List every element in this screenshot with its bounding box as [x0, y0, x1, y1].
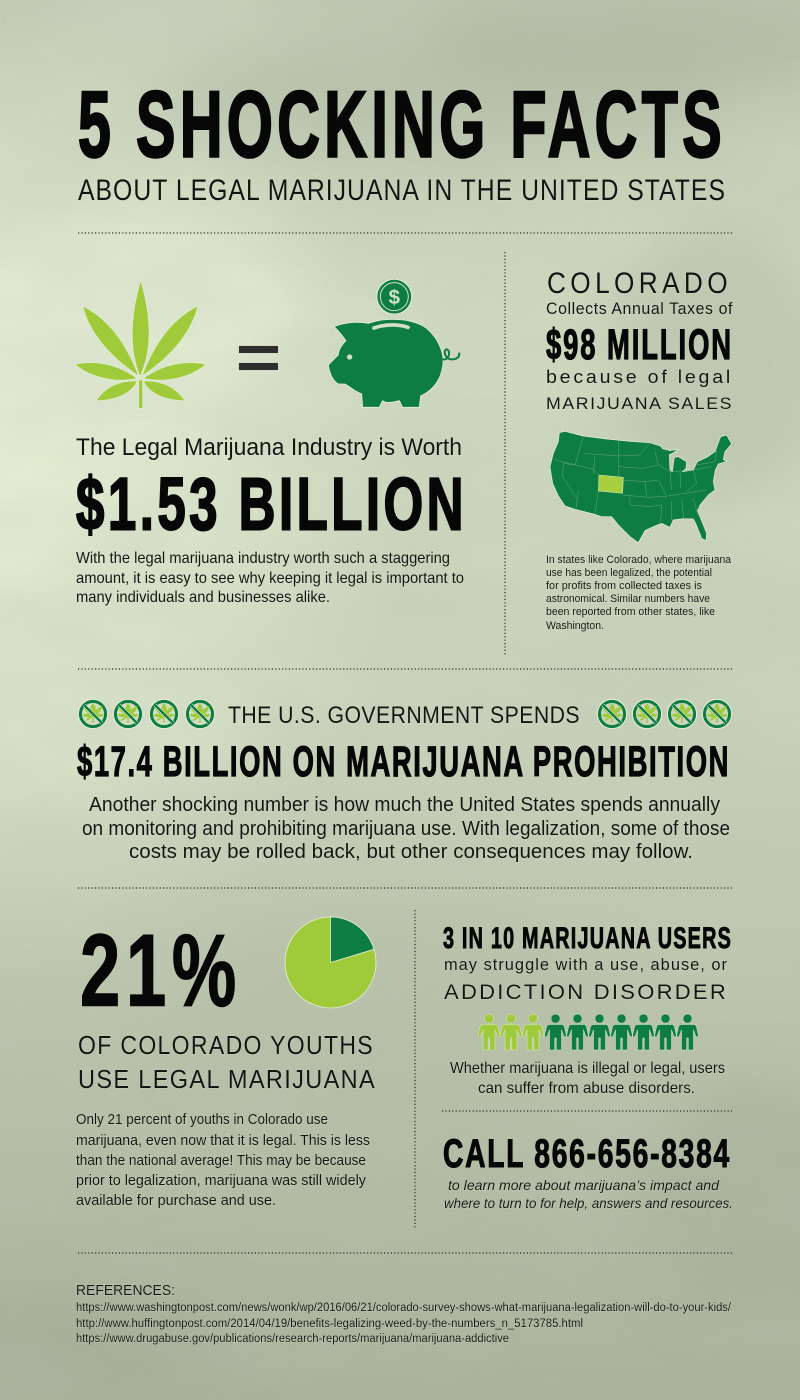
icon: equals sign — [238, 346, 278, 370]
text block: on monitoring and prohibiting marijuana use. With legalization, some of those — [82, 818, 730, 840]
pictogram: 3 in 10 people — [478, 1014, 698, 1050]
heading: USE LEGAL MARIJUANA — [78, 1064, 376, 1094]
references — [76, 1282, 732, 1345]
text block: With the legal marijuana industry worth such a staggering — [76, 550, 450, 567]
text block: Another shocking number is how much the United States spends annually — [89, 794, 720, 816]
references: https://www.drugabuse.gov/publications/research-reports/marijuana/marijuana-addictive — [76, 1333, 509, 1345]
text block: use has been legalized, the potential — [546, 567, 712, 579]
icon: piggy bank with coin: $ — [389, 286, 401, 309]
text block: Washington. — [546, 620, 604, 632]
text block — [546, 554, 732, 632]
callout: phone number: to learn more about marijuana’s impact and — [448, 1177, 720, 1193]
panel: prohibition spending — [77, 699, 732, 863]
pie chart — [285, 917, 376, 1008]
heading: because of legal — [546, 366, 733, 387]
icons: no marijuana row left — [78, 699, 215, 729]
text block: costs may be rolled back, but other consequences may follow. — [129, 841, 693, 863]
text block: can suffer from abuse disorders. — [478, 1080, 695, 1097]
text block: available for purchase and use. — [76, 1192, 276, 1209]
big number: 21% — [80, 914, 242, 1028]
references: https://www.washingtonpost.com/news/wonk/wp/2016/06/21/colorado-survey-shows-what-marijuana-legalization-will-do-to-your-kids/ — [76, 1302, 732, 1314]
text block: amount, it is easy to see why keeping it legal is important to — [76, 570, 464, 587]
text block: for profits from collected taxes is — [546, 580, 702, 592]
text block: In states like Colorado, where marijuana — [546, 554, 732, 566]
callout: phone number: where to turn to for help, answers and resources. — [444, 1195, 733, 1211]
heading: may struggle with a use, abuse, or — [444, 956, 728, 974]
icon: cannabis leaf — [75, 280, 206, 408]
text block: than the national average! This may be because — [76, 1152, 366, 1169]
icon: piggy bank with coin — [328, 279, 459, 407]
heading — [78, 1030, 376, 1094]
heading: Collects Annual Taxes of — [546, 299, 733, 318]
heading: THE U.S. GOVERNMENT SPENDS — [228, 702, 580, 729]
text block: many individuals and businesses alike. — [76, 589, 330, 606]
text block: astronomical. Similar numbers have — [546, 593, 710, 605]
panel: Colorado youths — [76, 914, 376, 1209]
icons: no marijuana row right — [597, 699, 732, 729]
references: http://www.huffingtonpost.com/2014/04/19/benefits-legalizing-weed-by-the-numbers_n_5173785.html — [76, 1318, 583, 1330]
heading: COLORADO — [547, 267, 732, 300]
heading: The Legal Marijuana Industry is Worth — [76, 434, 462, 461]
text block: Only 21 percent of youths in Colorado use — [76, 1111, 328, 1128]
text block: been reported from other states, like — [546, 606, 715, 618]
text block — [76, 1111, 370, 1209]
text block: Whether marijuana is illegal or legal, users — [450, 1060, 725, 1077]
text block: prior to legalization, marijuana was still widely — [76, 1172, 366, 1189]
heading: MARIJUANA SALES — [546, 394, 733, 413]
callout: phone number — [443, 1132, 733, 1211]
big number: $1.53 BILLION — [76, 462, 467, 546]
panel: use disorders — [443, 922, 732, 1097]
references: REFERENCES: — [76, 1282, 175, 1299]
text block — [450, 1060, 725, 1097]
text block: marijuana, even now that it is legal. This is less — [76, 1132, 370, 1149]
panel: Colorado taxes — [546, 267, 733, 632]
heading — [546, 267, 733, 413]
heading: ADDICTION DISORDER — [444, 980, 728, 1004]
heading — [443, 922, 732, 1004]
heading: OF COLORADO YOUTHS — [78, 1030, 374, 1060]
panel: industry worth — [75, 279, 467, 606]
text block — [76, 550, 464, 606]
icon: US map with Colorado highlighted — [550, 431, 732, 543]
text block — [82, 794, 730, 863]
